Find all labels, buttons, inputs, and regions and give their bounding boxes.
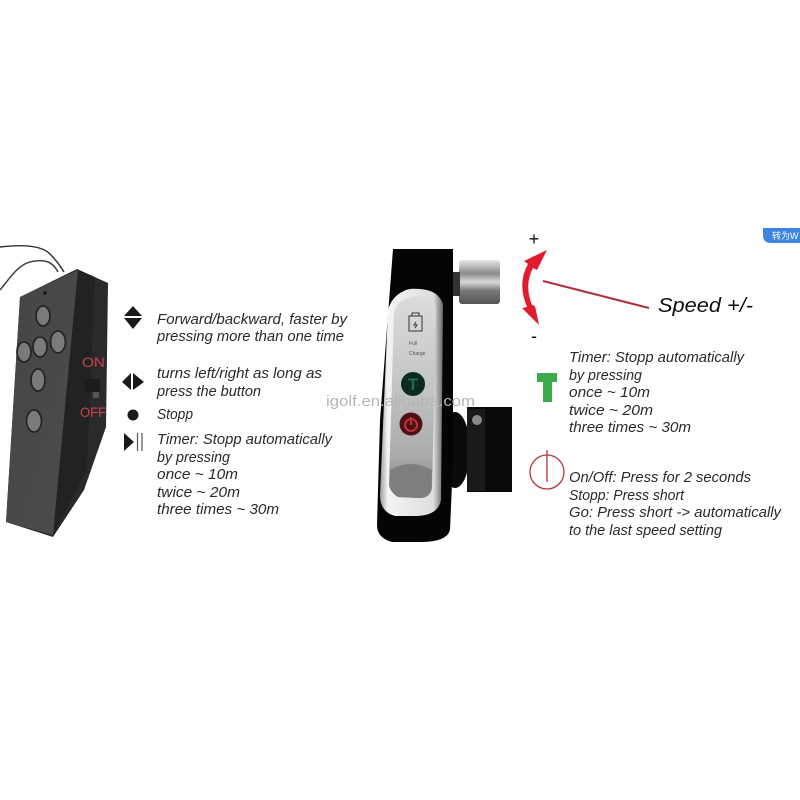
handle timer description: by pressing — [569, 367, 643, 384]
stop description: Stopp — [157, 406, 193, 423]
forward/backward description: Forward/backward, faster by — [157, 311, 348, 328]
forward/backward description: pressing more than one time — [156, 328, 344, 345]
icon: forward/backward arrows — [124, 306, 142, 329]
switch labels: ON — [82, 354, 105, 370]
icon: red speed arrow — [522, 250, 547, 325]
handle timer description: three times ~ 30m — [569, 419, 691, 436]
power button description: to the last speed setting — [569, 522, 723, 539]
handle timer description: once ~ 10m — [569, 384, 650, 401]
switch labels: OFF — [80, 404, 106, 420]
icon: green T — [537, 373, 557, 402]
handle photo — [377, 249, 512, 542]
remote buttons — [17, 306, 66, 432]
remote timer description: three times ~ 30m — [157, 501, 279, 518]
left/right description: press the button — [156, 383, 261, 400]
battery status labels — [409, 341, 426, 357]
plus label: + — [529, 229, 539, 249]
power button — [400, 412, 422, 436]
switch labels — [80, 354, 106, 420]
handle timer description — [569, 349, 745, 436]
remote control photo — [0, 246, 108, 537]
remote timer description: Timer: Stopp automatically — [157, 431, 333, 448]
icon: power symbol — [530, 450, 564, 489]
remote timer description: once ~ 10m — [157, 466, 238, 483]
power button description: Stopp: Press short — [569, 487, 685, 504]
minus label: - — [531, 326, 537, 346]
handle timer description: Timer: Stopp automatically — [569, 349, 745, 366]
battery status labels: Full — [409, 341, 417, 347]
power button description: Go: Press short -> automatically — [569, 504, 782, 521]
icon: left/right arrows — [122, 373, 144, 390]
icon: battery — [409, 313, 422, 331]
translate badge — [763, 228, 800, 243]
speed pointer line — [543, 281, 649, 308]
power button description: On/Off: Press for 2 seconds — [569, 469, 751, 486]
power button description — [569, 469, 782, 539]
battery status labels: Charge — [409, 351, 426, 357]
translate badge: 转为W — [772, 230, 799, 241]
handle timer description: twice ~ 20m — [569, 402, 653, 419]
left/right description — [156, 365, 323, 400]
timer button: T — [408, 375, 419, 394]
remote timer description — [157, 431, 333, 518]
watermark: igolf.en.alibaba.com — [326, 394, 475, 410]
icon: stop dot — [128, 410, 138, 420]
remote timer description: by pressing — [157, 449, 231, 466]
left/right description: turns left/right as long as — [157, 365, 323, 382]
remote timer description: twice ~ 20m — [157, 484, 240, 501]
speed label: Speed +/- — [658, 295, 753, 317]
icon: play/pause timer — [124, 433, 142, 451]
forward/backward description — [156, 311, 348, 345]
timer button — [401, 372, 425, 396]
